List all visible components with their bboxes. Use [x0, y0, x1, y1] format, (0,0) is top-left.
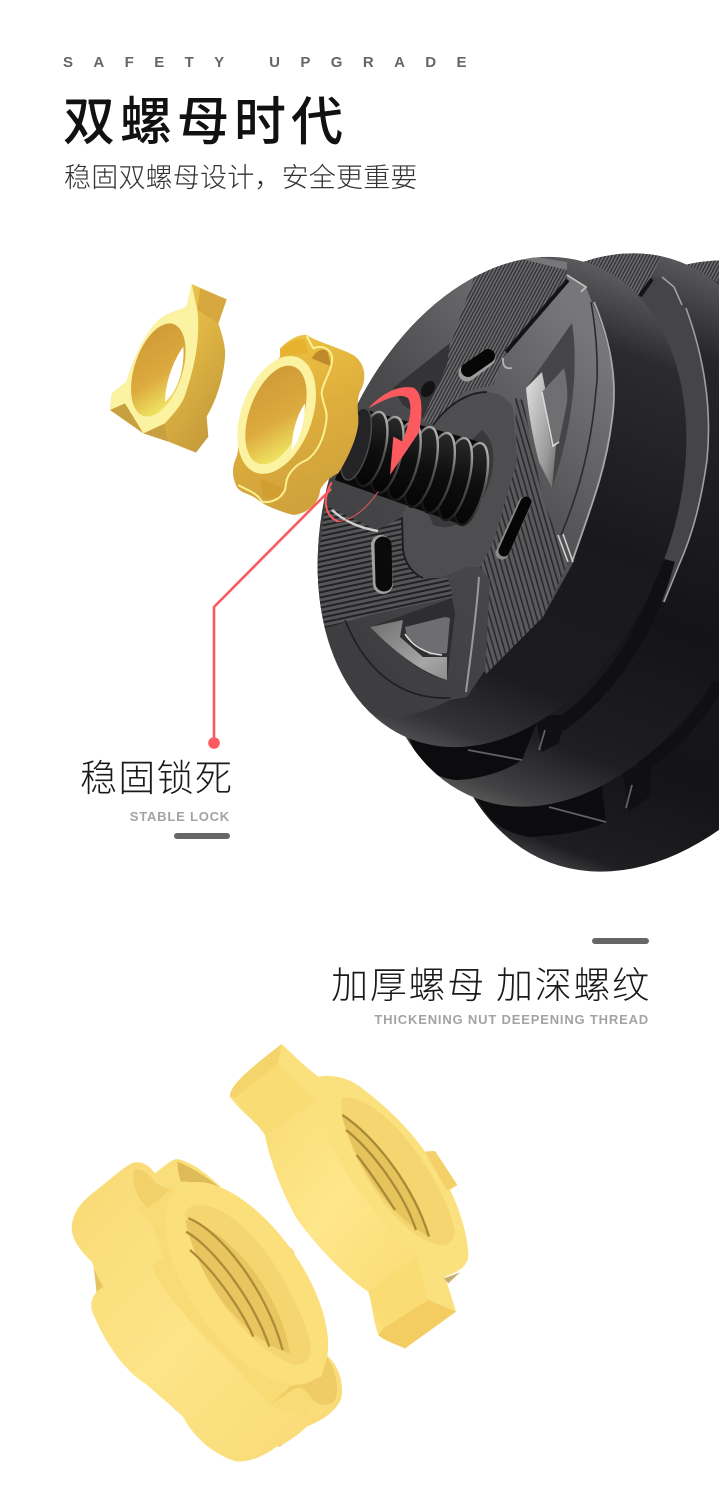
top facet: [230, 1044, 282, 1098]
hub dark edge: [402, 392, 487, 578]
see-through slit: [165, 347, 184, 402]
third plate tab: [622, 765, 652, 812]
third plate crescent highlights: [549, 785, 632, 822]
hatch top sector: [423, 250, 567, 425]
second plate top hatch: [584, 253, 660, 296]
gold nut rear: [110, 284, 227, 453]
window right inner highlight: [542, 392, 559, 446]
thread grooves: [342, 1115, 429, 1237]
thread grooves: [186, 1218, 283, 1350]
yellow nut left: [72, 1155, 360, 1462]
recess bottom: [270, 1357, 337, 1405]
rear tab: [425, 1151, 457, 1190]
hub: [402, 392, 517, 578]
window right inner: [542, 368, 567, 445]
third plate crescent: [477, 786, 606, 837]
red rotation arrow: [326, 387, 421, 522]
see-through slit: [292, 403, 305, 450]
window bottom inner: [405, 617, 450, 655]
lobe edge highlight: [238, 336, 332, 502]
slot left: [381, 545, 384, 584]
bottom tab: [368, 1255, 428, 1328]
gold nut front: [222, 335, 364, 515]
slot right: [502, 502, 526, 553]
window upper left hole: [418, 378, 438, 400]
hatch left sector: [310, 505, 453, 632]
third plate top hatch: [687, 260, 719, 282]
callout heading: stable lock: 稳固锁死: [80, 748, 233, 802]
recess top right: [177, 1161, 228, 1195]
crescent under front plate: [409, 723, 536, 780]
band between plates: [560, 560, 668, 725]
end facet: [378, 1300, 456, 1348]
crescent highlights: [468, 730, 545, 760]
second plate: [298, 194, 719, 866]
top tab: [567, 275, 586, 292]
recess top: [133, 1169, 170, 1208]
slit on second plate: [640, 279, 652, 296]
face: [110, 284, 198, 442]
threaded bolt: [334, 405, 495, 528]
tab under front plate: [535, 715, 566, 752]
second plate details: [584, 253, 710, 602]
inner lip: [185, 1205, 311, 1364]
bright strip: [332, 510, 378, 531]
section label: SAFETY UPGRADE: [63, 54, 487, 71]
recess top right: [312, 350, 332, 367]
recess bottom: [260, 478, 284, 498]
callout bar: [174, 833, 230, 839]
dark slit: [506, 280, 568, 352]
section bar: [592, 938, 649, 944]
plate face: [300, 250, 614, 717]
third plate: [353, 195, 719, 937]
callout caption: stable lock: STABLE LOCK: [130, 809, 230, 824]
third plate band: [640, 682, 719, 768]
top tab face: [235, 1063, 317, 1135]
front plate body: [251, 203, 719, 801]
second plate rim highlight: [662, 277, 709, 602]
hole: [121, 317, 196, 423]
title: 双螺母时代: [63, 80, 348, 155]
bottom facet: [110, 403, 168, 442]
slit hook: [503, 358, 512, 368]
window upper left: [393, 343, 450, 418]
heading: thick nut deep thread: 加厚螺母 加深螺纹: [331, 955, 651, 1009]
bolt collar: [420, 430, 493, 527]
subtitle: 稳固双螺母设计，安全更重要: [64, 156, 418, 195]
window bottom: [370, 598, 455, 680]
side band: [265, 1102, 417, 1292]
plate face details: [300, 250, 614, 717]
caption: thick nut deep thread: THICKENING NUT DEEPENING THREAD: [374, 1012, 649, 1027]
thread lip: [342, 1098, 455, 1246]
callout leader line: [208, 489, 331, 749]
slot top: [467, 356, 488, 373]
window bottom bright: [370, 620, 447, 680]
window right bright slab: [526, 372, 556, 488]
dumbbell: [318, 253, 719, 872]
face rim highlights: [561, 302, 597, 535]
under shadow: [444, 1272, 460, 1283]
rear shadow parts: [93, 1263, 307, 1447]
second plate side strip: [640, 277, 709, 602]
thread cavity: [185, 1220, 290, 1353]
face ring: [222, 345, 331, 485]
recess top: [280, 339, 308, 357]
flange: [137, 1187, 327, 1417]
face ring: [133, 1155, 360, 1412]
window bottom inner highlight: [405, 634, 442, 655]
hole: [233, 357, 319, 473]
tab top face: [197, 288, 227, 323]
window right: [526, 323, 575, 488]
thread hole: [342, 1115, 429, 1237]
product illustration: dumbbell and nuts: [72, 253, 719, 1462]
hatch right sector: [480, 398, 568, 675]
yellow nut right: [230, 1044, 468, 1348]
